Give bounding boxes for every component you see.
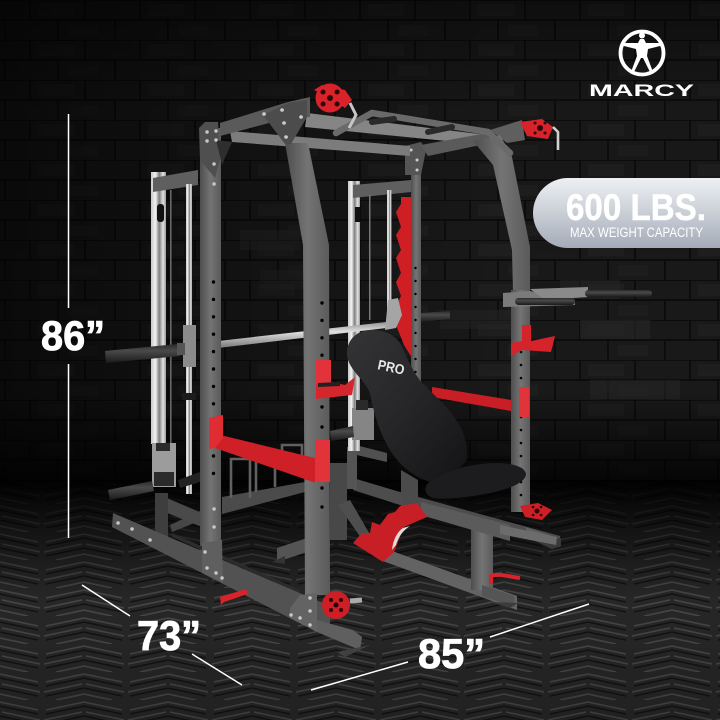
rear base and storage rails	[155, 443, 561, 564]
rear upright	[405, 142, 426, 470]
red pin on bench	[491, 575, 520, 584]
dip bars	[503, 287, 652, 307]
bench seat	[425, 463, 526, 499]
top side beam	[220, 97, 310, 136]
barbell carriage lower with sleeves	[108, 426, 354, 500]
dimension: depth 73	[82, 585, 242, 685]
left safety hook	[316, 360, 355, 399]
red adjustment bracket	[353, 503, 427, 562]
pulley top right	[520, 119, 558, 150]
middle bent upright	[263, 100, 330, 595]
left safety arm	[209, 415, 330, 482]
callout: max weight capacity	[533, 178, 720, 248]
dimension: width 85: 85”	[418, 630, 485, 677]
bench back pad	[347, 330, 467, 482]
left cable tower	[151, 170, 198, 494]
red pin on base	[220, 589, 248, 605]
pull-up bar	[336, 113, 510, 153]
callout: max weight capacity: 600 LBS.	[566, 187, 706, 228]
pulley top left	[314, 84, 356, 128]
bench support frame	[338, 470, 557, 610]
brick wall background	[0, 0, 720, 500]
dimension: width 85	[311, 604, 589, 690]
smith machine barbell	[105, 298, 450, 363]
top cross beams	[230, 113, 525, 156]
weight plate rack	[396, 197, 412, 358]
rubber floor	[0, 480, 720, 720]
right cable tower	[348, 180, 411, 451]
logo: Marcy	[589, 32, 695, 100]
logo wordmark: MARCY	[589, 81, 695, 100]
pro logo on bench: PRO	[376, 356, 406, 378]
main base rail	[112, 513, 370, 657]
logo emblem	[620, 32, 664, 74]
dimension: height 86: 86”	[41, 312, 105, 359]
pulley base rear	[520, 503, 552, 520]
left front upright	[199, 122, 232, 568]
right side rear upright	[473, 135, 530, 512]
pulley base front	[322, 591, 362, 619]
dimension: depth 73: 73”	[137, 612, 201, 659]
right safety hook and plate	[432, 325, 555, 417]
power cage machine	[105, 84, 652, 657]
